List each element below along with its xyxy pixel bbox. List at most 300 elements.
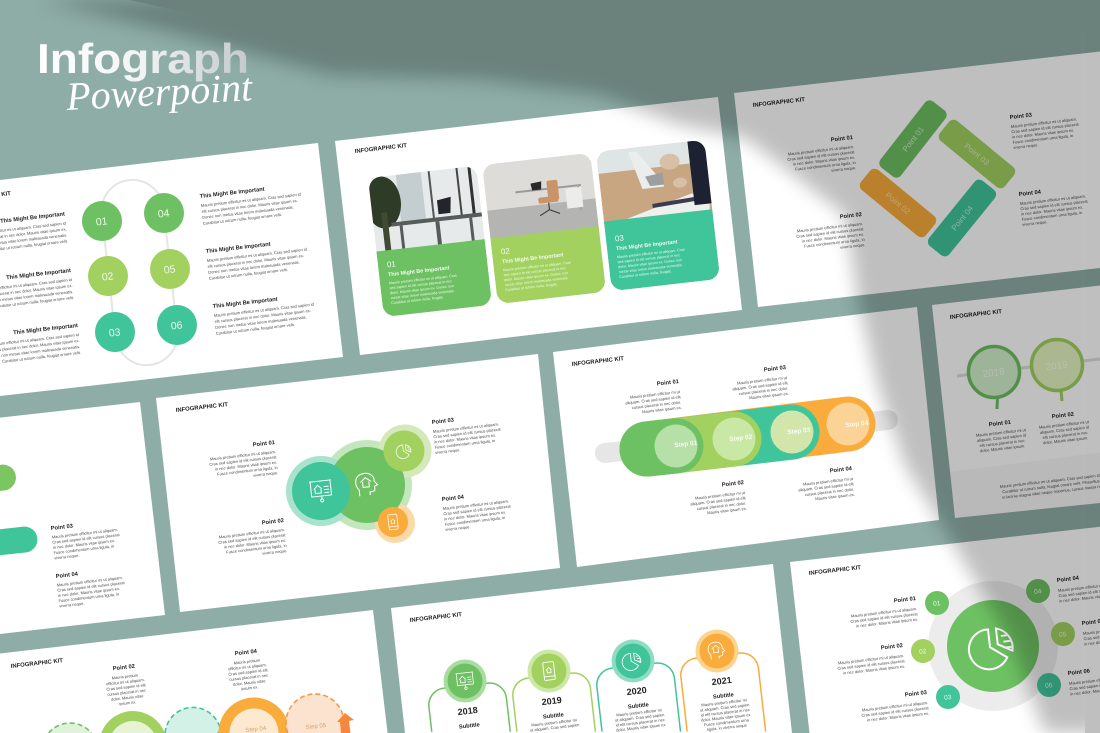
- text point 04: [56, 566, 128, 609]
- text point 01: Mauris pretium efficitur mi ut aliquam.: [788, 144, 854, 156]
- bar point 03: [936, 117, 1018, 191]
- text point 04: Cras sed sapien id elit cursus placerat: [1020, 198, 1089, 211]
- step 04: [826, 402, 870, 446]
- pin 2018: 2018: [982, 367, 1006, 380]
- text point 04: dolor. Mauris vitae: [233, 678, 266, 687]
- text point 02: aliquam. Cras sed sapien id elit: [690, 495, 747, 506]
- text point 02: elit cursus placerat in nec: [1042, 430, 1088, 440]
- step 02: [712, 418, 756, 460]
- text point 03: Mauris vitae ipsum ex.: [749, 391, 789, 400]
- text point 01: Mauris vitae ipsum ex.: [642, 405, 682, 414]
- text 2021: ut aliquam. Cras sed sapien: [700, 702, 750, 713]
- card 01: This Might Be Important: [388, 265, 450, 278]
- text block right 1: This Might Be Important: [200, 187, 265, 200]
- text 2019: 2019: [541, 695, 562, 707]
- text point 01: dolor. Mauris vitae ipsum.: [980, 443, 1025, 453]
- text 2021: dolor. Mauris vitae ipsum ex: [701, 712, 751, 723]
- text block right 2: Curabitur ut rutrum nulla, feugiat ornare velit.: [209, 267, 288, 281]
- text point 01: [975, 418, 1029, 454]
- text point 01: Fusce condimentum urna ligula, in: [217, 465, 278, 477]
- step circle 2: [101, 711, 165, 733]
- slide heading: INFOGRAPHIC KIT: [410, 612, 463, 624]
- icon: phone: [388, 514, 398, 530]
- text point 03: Point 03: [51, 524, 73, 532]
- card 02: [482, 153, 606, 304]
- node 01: [925, 591, 949, 615]
- text point 03: viverra neque.: [1013, 142, 1039, 150]
- text point 04: Point 04: [1019, 189, 1042, 198]
- panel: radial points slide: [790, 527, 1100, 733]
- step 03: [770, 410, 814, 454]
- node 03: [936, 685, 960, 709]
- node 04: [1026, 579, 1050, 603]
- icon: pie chart: [395, 444, 412, 459]
- card 01: Curabitur ut rutrum nulla, feugiat.: [391, 295, 444, 305]
- step circle 3: [165, 707, 221, 733]
- node 05: 05: [1059, 631, 1067, 639]
- text point 04: Cras sed sapien id elit cursus placerat: [443, 503, 512, 516]
- card 01: sed sapien id elit cursus placerat in nec: [389, 279, 452, 290]
- text block right 1: Donec non metus vitae lorem malesuada venenatis.: [202, 204, 294, 220]
- card 03: Mauris pretium efficitur mi ut aliquam. Cras: [617, 248, 685, 259]
- text point 04: in nec dolor. Mauris vitae ipsum ex.: [444, 509, 506, 521]
- step 01: Step 01: [674, 440, 698, 449]
- text point 01: Point 01: [657, 379, 679, 387]
- card 01: dolor. Mauris vitae ipsum ex. Donec non: [390, 284, 454, 295]
- step circle 4: [218, 698, 290, 733]
- text point 01: Point 01: [894, 596, 916, 604]
- circle 05: [150, 249, 190, 289]
- text point 04: Mauris pretium efficitur mi ut aliquam.: [443, 498, 509, 511]
- text point 02: aliquam. Cras sed sapien id: [1040, 424, 1089, 435]
- text point 03: [1010, 107, 1082, 150]
- icon: presentation board: [309, 480, 333, 503]
- slide heading: INFOGRAPHIC KIT: [355, 143, 408, 155]
- text point 01: elit cursus placerat in nec: [979, 438, 1025, 448]
- text point 04: Fusce condimentum urna ligula, in: [58, 591, 119, 603]
- bar point 04: Point 04: [950, 204, 975, 233]
- slide heading: INFOGRAPHIC KIT: [176, 402, 229, 414]
- card 01: 01: [386, 259, 397, 269]
- bar point 03: Point 03: [962, 142, 991, 168]
- circle 04: [144, 193, 184, 233]
- text block left 3: Curabitur ut rutrum nulla, feugiat ornare velit.: [2, 350, 81, 364]
- title word: Infograph: Infograph: [37, 35, 249, 82]
- text 2020: ut aliquam. Cras sed sapien: [615, 712, 665, 723]
- orange arrow: [337, 713, 354, 733]
- icon: head with house: [355, 472, 379, 497]
- badge 2018: [444, 660, 486, 702]
- text point 02: viverra neque.: [840, 242, 866, 250]
- text block left 2: This Might Be Important: [6, 268, 71, 281]
- card 02: Mauris pretium efficitur mi ut aliquam. Cras: [503, 261, 571, 272]
- timeline track: [957, 359, 1100, 376]
- node 06: 06: [1045, 682, 1053, 690]
- text point 03: cursus placerat in nec dolor.: [738, 385, 788, 396]
- text point 04: Point 04: [442, 494, 465, 503]
- text point 01: in nec dolor. Mauris vitae ipsum ex.: [856, 616, 918, 629]
- text 2018: [457, 705, 480, 731]
- text 2020: Subtitle: [628, 702, 649, 711]
- text point 03: Cras sed sapien id elit cursus placerat: [52, 532, 121, 545]
- pin 2019: 2019: [1045, 360, 1069, 373]
- card 02: metus vitae lorem malesuada venenatis.: [505, 276, 569, 287]
- card 01: Mauris pretium efficitur mi ut aliquam. Cras: [389, 274, 457, 285]
- card 03: Curabitur ut rutrum nulla, feugiat.: [619, 269, 672, 279]
- slide heading: INFOGRAPHIC KIT: [809, 565, 862, 577]
- circle 01: 01: [95, 215, 108, 229]
- text point 01: aliquam. Cras sed sapien id: [977, 432, 1026, 443]
- text point 01: [207, 440, 279, 483]
- circle 05: 05: [163, 263, 176, 277]
- text point 01: viverra neque.: [253, 470, 279, 478]
- text point 03: Point 03: [1010, 113, 1032, 121]
- text point 04: in nec dolor. Mauris vitae ipsum ex.: [58, 586, 120, 598]
- node 02: [911, 639, 935, 663]
- card 02: Curabitur ut rutrum nulla, feugiat.: [505, 282, 558, 292]
- text point 01: Cras sed sapien id elit cursus placerat: [850, 611, 919, 624]
- text block right 1: Mauris pretium efficitur mi ut aliquam. Cras sed sapien id: [201, 192, 301, 208]
- text point 01: aliquam. Cras sed sapien id elit: [625, 394, 682, 405]
- outer gray disc: [928, 581, 1058, 711]
- text point 01: Cras sed sapien id elit cursus placerat: [209, 454, 278, 467]
- text 2021: Fusce condimentum urna: [704, 717, 750, 727]
- step circle 5: Step 05: [305, 723, 327, 731]
- text point 03: viverra neque.: [435, 447, 461, 455]
- text block left 3: [0, 323, 81, 366]
- text 2019: Mauris pretium efficitur mi: [531, 717, 577, 727]
- card 01: metus vitae lorem malesuada venenatis.: [391, 289, 455, 300]
- text point 02: Mauris vitae ipsum ex.: [707, 506, 747, 515]
- circle 03: 03: [108, 326, 121, 340]
- text point 04: [1019, 184, 1091, 227]
- text block right 3: This Might Be Important: [213, 297, 278, 310]
- slide heading: INFOGRAPHIC KIT: [11, 658, 64, 670]
- panel: six numbered circles slide: [0, 143, 343, 396]
- card 01: [362, 166, 492, 318]
- text point 06: Point 06: [1068, 669, 1090, 677]
- text 2018: 2018: [457, 705, 478, 717]
- text point 01: [785, 135, 857, 178]
- text point 04: Cras sed sapien id elit: [228, 667, 269, 677]
- text point 01: Cras sed sapien id elit cursus placerat: [787, 149, 856, 162]
- text point 02: cursus placerat in nec dolor.: [696, 500, 746, 511]
- text point 03: Point 03: [764, 365, 786, 373]
- badge 2020: [612, 640, 654, 682]
- text point 04: Point 04: [235, 649, 258, 657]
- text point 04: Fusce condimentum urna ligula, in: [1021, 210, 1082, 222]
- text block right 2: elit cursus placerat in nec dolor. Mauris vitae ipsum ex.: [207, 253, 304, 269]
- circle 01: [82, 201, 122, 241]
- circle 03: [95, 312, 135, 352]
- step 04: Step 04: [845, 420, 869, 429]
- card 02: sed sapien id elit cursus placerat in nec: [503, 266, 566, 277]
- text point 02: viverra neque.: [262, 548, 288, 556]
- text point 03: Mauris pretium efficitur mi ut aliquam.: [52, 527, 118, 539]
- step circle 5: [286, 694, 344, 733]
- text point 01: Point 01: [989, 420, 1011, 428]
- panel: photo cards slide: [335, 97, 742, 355]
- text 2021: id elit cursus placerat in nec: [700, 707, 750, 718]
- node 04: 04: [1034, 588, 1042, 596]
- circle 04: 04: [157, 207, 170, 221]
- title word: Powerpoint: Powerpoint: [64, 64, 254, 119]
- text point 04: viverra neque.: [445, 524, 471, 532]
- text point 04: [442, 489, 514, 532]
- gray track: [605, 420, 888, 453]
- text block right 1: elit cursus placerat in nec dolor. Mauris vitae ipsum ex.: [201, 198, 298, 214]
- text 2020: 2020: [626, 685, 647, 697]
- text point 01: Point 01: [253, 440, 275, 448]
- text point 02: Fusce condimentum urna ligula, in: [226, 543, 287, 555]
- text block left 1: This Might Be Important: [0, 212, 65, 225]
- loop track: [98, 177, 181, 368]
- text point 01: Mauris pretium efficitur mi ut: [976, 427, 1027, 438]
- text point 04: Point 04: [830, 466, 853, 474]
- bar point 02: Point 02: [883, 191, 912, 217]
- text point 02: efficitur mi ut aliquam.: [106, 677, 145, 686]
- text point 03: [51, 518, 123, 561]
- text point 01: in nec dolor. Mauris vitae ipsum ex.: [793, 154, 855, 167]
- text point 01: viverra neque.: [831, 165, 857, 173]
- text point 02: Cras sed sapien id elit cursus placerat: [796, 226, 865, 239]
- text point 02: Point 02: [881, 643, 903, 651]
- text point 02: Mauris pretium efficitur mi ut: [1039, 419, 1090, 430]
- text point 03: Point 03: [905, 690, 927, 698]
- panel: partial pills slide: [0, 402, 165, 634]
- arch 2019: [511, 671, 595, 733]
- text point 04: efficitur mi ut aliquam.: [228, 662, 267, 671]
- step 01: [654, 424, 698, 468]
- text point 02: Mauris pretium efficitur mi ut aliquam.: [797, 221, 863, 233]
- text point 02: [216, 518, 288, 561]
- text point 01: Mauris pretium efficitur mi ut: [630, 389, 681, 400]
- text point 03: Fusce condimentum urna ligula, in: [434, 438, 495, 450]
- text point 04: Mauris pretium efficitur mi ut: [803, 476, 854, 487]
- text 2020: dolor. Mauris vitae ipsum ex: [616, 722, 666, 733]
- text point 02: [688, 480, 748, 517]
- text point 02: Cras sed sapien id elit cursus placerat: [218, 532, 287, 545]
- text block left 1: [0, 212, 68, 255]
- text point 04: [1057, 570, 1100, 603]
- text point 03: Cras sed sapien id elit cursus placerat: [861, 705, 930, 718]
- text point 04: Mauris pretium efficitur mi ut aliquam.: [57, 575, 123, 587]
- text point 02: in nec dolor. Mauris vitae ipsum ex.: [224, 537, 286, 550]
- badge 2021: [696, 630, 738, 672]
- node 01: 01: [933, 600, 941, 608]
- text point 03: Mauris pretium efficitur mi ut aliquam.: [1011, 116, 1077, 129]
- text point 02: [1038, 410, 1092, 446]
- text block right 3: Mauris pretium efficitur mi ut aliquam. Cras sed sapien id: [214, 302, 314, 318]
- circle 06: 06: [170, 319, 183, 333]
- text point 02: Fusce condimentum urna ligula, in: [804, 237, 865, 249]
- text point 01: in nec dolor. Mauris vitae ipsum ex.: [215, 459, 277, 472]
- panel: yearly timeline slide: [391, 564, 792, 733]
- text point 05: [1082, 613, 1100, 646]
- card 03: sed sapien id elit cursus placerat in nec: [617, 253, 680, 264]
- card 03: dolor. Mauris vitae ipsum ex. Donec non: [618, 258, 682, 269]
- text 2019: [526, 693, 580, 733]
- green pill: [0, 465, 16, 491]
- text point 04: cursus placerat in nec dolor.: [804, 486, 854, 497]
- card 02: This Might Be Important: [502, 252, 564, 265]
- slide heading: INFOGRAPHIC KIT: [572, 356, 625, 368]
- text 2021: 2021: [711, 675, 732, 687]
- slide heading: INFOGRAPHIC KIT: [753, 97, 806, 109]
- text block right 3: Curabitur ut rutrum nulla, feugiat ornare velit.: [216, 322, 295, 336]
- bar point 01: [877, 98, 949, 180]
- text 2021: [696, 673, 752, 733]
- text point 03: aliquam. Cras sed sapien id elit: [732, 380, 789, 391]
- pin 2018: [968, 346, 1020, 409]
- panel: steps capsule slide: [553, 307, 939, 567]
- text point 02: cursus placerat in nec: [107, 688, 146, 697]
- text point 03: in nec dolor. Mauris vitae ipsum ex.: [434, 432, 496, 444]
- panel: arrow circles slide: [0, 610, 388, 733]
- text 2020: [611, 683, 666, 733]
- panel: year pins slide: [932, 286, 1100, 518]
- text point 03: [730, 365, 790, 402]
- text point 03: viverra neque.: [54, 553, 80, 561]
- teal arrow: [217, 725, 229, 733]
- text point 04: Point 04: [56, 571, 79, 580]
- circle 06: [157, 305, 197, 345]
- text point 04: [796, 466, 856, 503]
- text point 04: Fusce condimentum urna ligula, in: [444, 515, 505, 527]
- text point 01: Point 01: [831, 135, 853, 143]
- text point 03: Mauris pretium efficitur mi ut: [737, 375, 788, 386]
- node 06: [1037, 673, 1061, 697]
- text point 02: [794, 212, 866, 255]
- card 02: 02: [500, 246, 511, 256]
- text 2019: Subtitle: [543, 712, 564, 721]
- node 05: [1051, 622, 1075, 646]
- text point 02: Point 02: [113, 664, 135, 672]
- text block right 2: Donec non metus vitae lorem malesuada venenatis.: [208, 259, 300, 275]
- text point 04: Mauris pretium: [233, 657, 261, 665]
- text point 02: in nec dolor. Mauris vitae ipsum ex.: [843, 663, 905, 676]
- text point 02: Cras sed sapien id elit: [106, 682, 147, 692]
- text point 02: Mauris pretium efficitur mi ut aliquam.: [219, 527, 285, 539]
- text point 04: in nec dolor. Mauris vitae ipsum ex.: [1021, 204, 1083, 216]
- text point 03: in nec dolor. Mauris vitae ipsum ex.: [1012, 127, 1074, 139]
- text block left 3: This Might Be Important: [13, 323, 78, 336]
- text point 03: Mauris pretium efficitur mi ut aliquam.: [433, 421, 499, 434]
- text point 02: Mauris pretium efficitur mi ut aliquam.: [838, 653, 904, 665]
- text point 02: Mauris pretium: [111, 672, 139, 680]
- step 02: Step 02: [729, 434, 753, 443]
- pin 2019: [1032, 340, 1082, 401]
- card 03: This Might Be Important: [616, 239, 678, 252]
- text 2020: id elit cursus placerat in nec: [615, 717, 665, 728]
- text point 01: Mauris pretium efficitur mi ut aliquam.: [210, 449, 276, 461]
- circle 02: [88, 256, 128, 296]
- arch 2021: [679, 651, 766, 733]
- center green disc with pie icon: [947, 600, 1039, 692]
- text point 02: Point 02: [262, 518, 284, 526]
- capsule segments: [647, 424, 848, 449]
- text point 04: Mauris vitae ipsum ex.: [815, 492, 855, 501]
- card 03: metus vitae lorem malesuada venenatis.: [619, 263, 683, 274]
- panel: bubbles slide: [156, 354, 560, 612]
- step 03: Step 03: [787, 427, 811, 436]
- text block right 2: [206, 238, 309, 281]
- text point 03: Mauris pretium efficitur mi ut aliquam.: [862, 700, 928, 712]
- teal pill: [0, 527, 37, 555]
- text point 03: Fusce condimentum urna ligula, in: [1012, 133, 1073, 145]
- text point 04: Mauris pretium efficitur mi ut aliquam.: [1020, 193, 1086, 206]
- text 2020: Mauris pretium efficitur mi: [616, 707, 662, 717]
- text 2019: ut aliquam. Cras sed sapien: [530, 722, 580, 733]
- text point 04: cursus placerat in nec: [229, 673, 268, 682]
- text point 04: viverra neque.: [59, 601, 85, 609]
- text block left 2: [0, 268, 74, 311]
- text block right 1: [200, 183, 303, 226]
- text point 02: Point 02: [1052, 412, 1074, 420]
- text point 02: Cras sed sapien id elit cursus placerat: [837, 658, 906, 671]
- text point 03: [432, 412, 504, 455]
- text 2018: Subtitle: [459, 722, 480, 731]
- node 03: 03: [944, 694, 952, 702]
- card 02: dolor. Mauris vitae ipsum ex. Donec non: [504, 271, 568, 282]
- text point 04: Cras sed sapien id elit cursus placerat: [57, 580, 126, 593]
- badge 2019: [528, 650, 570, 692]
- arch 2020: [595, 661, 681, 733]
- card 03: 03: [614, 233, 625, 243]
- text point 06: [1068, 663, 1100, 696]
- panel: diamond slide: [734, 52, 1100, 307]
- text block right 2: This Might Be Important: [206, 242, 271, 255]
- card 03: [596, 137, 723, 291]
- text point 04: aliquam. Cras sed sapien id elit: [798, 481, 855, 492]
- text block right 3: elit cursus placerat in nec dolor. Mauris vitae ipsum ex.: [214, 308, 311, 324]
- slide heading: INFOGRAPHIC KIT: [950, 309, 1003, 321]
- node 02: 02: [919, 648, 927, 656]
- text point 01: cursus placerat in nec dolor.: [631, 399, 681, 410]
- bar point 04: [925, 177, 999, 259]
- text block right 1: Curabitur ut rutrum nulla, feugiat ornare velit.: [203, 212, 282, 226]
- text point 02: Mauris pretium efficitur mi ut: [695, 490, 746, 501]
- text point 04: [226, 648, 271, 692]
- text point 01: Mauris pretium efficitur mi ut aliquam.: [851, 606, 917, 618]
- text point 02: ipsum ex.: [119, 699, 137, 706]
- bar point 02: [857, 166, 939, 240]
- text 2021: ligula, in viverra neque: [707, 722, 748, 732]
- text point 04: viverra neque.: [1022, 219, 1048, 227]
- text 2021: Subtitle: [713, 692, 734, 701]
- text block right 3: Donec non metus vitae lorem malesuada venenatis.: [215, 314, 307, 330]
- text point 03: Cras sed sapien id elit cursus placerat: [433, 426, 502, 439]
- text block right 3: [213, 293, 316, 336]
- text point 01: [848, 596, 919, 629]
- text point 03: in nec dolor. Mauris vitae ipsum ex.: [53, 538, 115, 550]
- text point 02: Point 02: [722, 480, 744, 488]
- text point 04: ipsum ex.: [241, 684, 259, 691]
- text point 02: Point 02: [840, 212, 862, 220]
- text point 04: Point 04: [1057, 575, 1080, 584]
- arch 2018: [427, 681, 510, 733]
- bar point 01: Point 01: [901, 125, 926, 154]
- text point 01: Fusce condimentum urna ligula, in: [795, 160, 856, 172]
- text point 03: Point 03: [432, 418, 454, 426]
- text point 01: [623, 379, 683, 416]
- text point 02: [835, 643, 906, 676]
- text point 03: Fusce condimentum urna ligula, in: [53, 543, 114, 555]
- text block right 2: Mauris pretium efficitur mi ut aliquam. Cras sed sapien id: [207, 247, 307, 263]
- step circle 1: [49, 723, 91, 733]
- text 2021: Mauris pretium efficitur mi: [701, 697, 747, 707]
- text point 02: [104, 663, 149, 707]
